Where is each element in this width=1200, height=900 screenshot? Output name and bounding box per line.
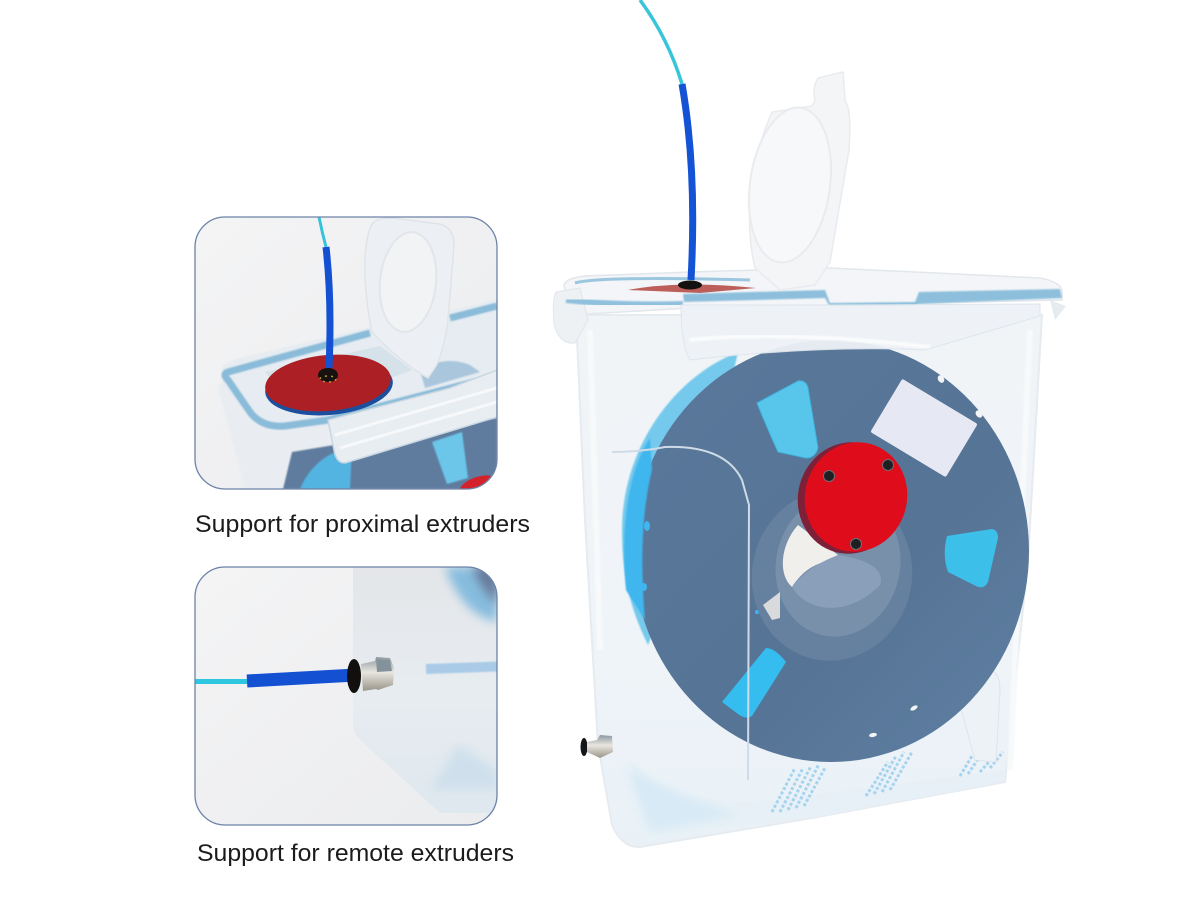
spool mounting holes xyxy=(869,374,984,738)
spool core ring xyxy=(736,474,928,676)
hub screws xyxy=(824,460,894,550)
hub side shadow xyxy=(785,430,915,566)
red hub xyxy=(793,431,919,563)
panel: remote extruder inset xyxy=(195,567,501,825)
caption: remote extruders: Support for remote extruders xyxy=(197,840,514,867)
filament coil behind spool xyxy=(622,352,738,645)
spool shadow xyxy=(445,567,497,622)
front clip xyxy=(681,304,1040,360)
desiccant lower tint xyxy=(630,760,1005,835)
box body xyxy=(576,315,1042,847)
translucent inner wall xyxy=(612,447,749,780)
red disc xyxy=(265,354,391,412)
filament dots xyxy=(641,521,759,614)
white label xyxy=(870,379,978,477)
centre hole xyxy=(783,525,838,587)
black collar xyxy=(347,659,361,693)
desiccant packet xyxy=(960,668,1000,762)
cyan filament xyxy=(640,0,682,84)
PTFE tube xyxy=(247,675,356,681)
bright filament edge xyxy=(624,438,652,620)
lid xyxy=(222,328,371,382)
black nut xyxy=(678,280,702,290)
lid rear and surface xyxy=(564,268,1062,315)
main product: filament box xyxy=(553,0,1066,847)
box wall xyxy=(353,567,497,813)
metal fitting xyxy=(361,657,394,691)
desiccant print xyxy=(772,750,1003,812)
window: upper xyxy=(757,381,818,458)
side clip xyxy=(553,288,588,343)
flap xyxy=(365,218,454,378)
lid seal xyxy=(225,306,497,426)
box body in inset xyxy=(217,300,497,489)
red hub edge xyxy=(460,475,491,488)
opening xyxy=(265,346,412,378)
small notch xyxy=(763,592,780,620)
spool window xyxy=(432,432,468,484)
opened flap xyxy=(750,72,850,290)
lid seal xyxy=(566,300,683,304)
blue tube xyxy=(682,84,693,280)
window: right xyxy=(945,529,998,587)
spool seen through box xyxy=(283,418,497,489)
caption: proximal extruders: Support for proximal extruders xyxy=(195,511,530,538)
red disc under lid xyxy=(628,284,756,293)
fitting: collar xyxy=(580,738,588,756)
filament and tube xyxy=(319,217,326,247)
panel: proximal extruder inset xyxy=(195,217,500,503)
desiccant shadow xyxy=(434,747,496,790)
fitting: metal xyxy=(587,735,613,758)
nut xyxy=(318,368,338,382)
blue disc xyxy=(265,374,393,416)
filament through box xyxy=(300,452,352,488)
spool flange xyxy=(633,340,1029,762)
blue band through wall xyxy=(426,661,501,674)
clip xyxy=(328,370,497,463)
window: lower xyxy=(722,648,786,718)
filament xyxy=(195,679,248,684)
